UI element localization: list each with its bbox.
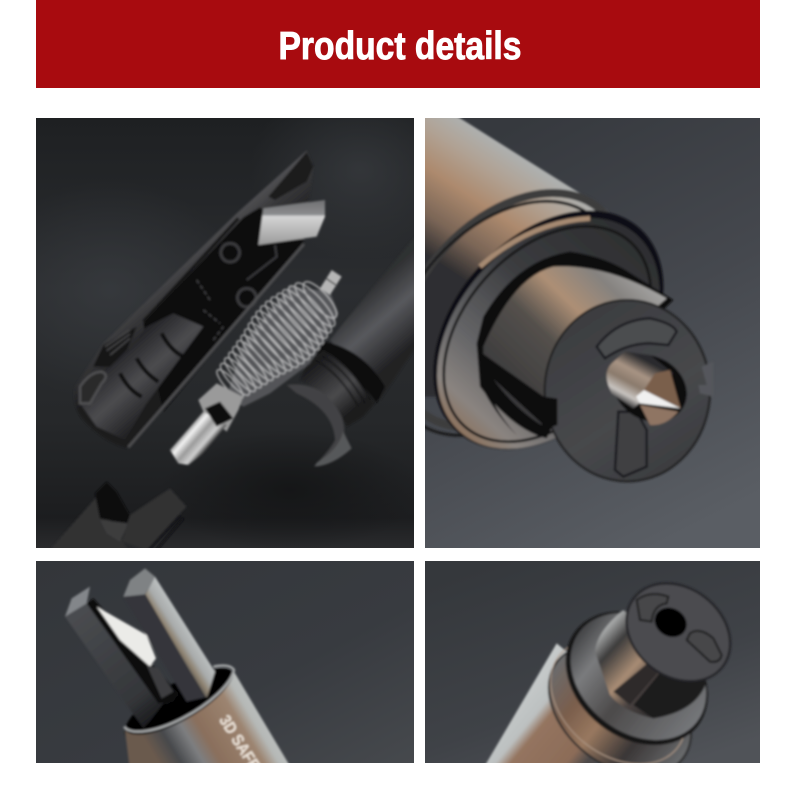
upper slot xyxy=(597,318,677,358)
end disc xyxy=(624,581,732,682)
panel: breaker tip close-up xyxy=(425,118,760,548)
center hole xyxy=(654,606,688,638)
title banner xyxy=(36,0,760,88)
title: Product details xyxy=(278,25,522,68)
blade xyxy=(258,200,325,245)
panel: rear view of breaker head xyxy=(425,561,760,763)
brand mark: 3D SAFETY xyxy=(215,712,274,790)
hole and breaker pin xyxy=(605,352,688,426)
neck xyxy=(477,252,673,438)
flange xyxy=(564,610,709,746)
back ring xyxy=(425,188,610,438)
firing pin xyxy=(170,270,342,465)
right prong xyxy=(123,568,215,702)
pen body xyxy=(425,118,596,398)
pen body xyxy=(484,642,594,763)
left prong with blade xyxy=(65,587,178,728)
panel: exploded view of cutter head xyxy=(36,118,414,548)
flange xyxy=(433,209,664,450)
lower left tool fragment xyxy=(54,482,186,548)
shadow at prong base xyxy=(142,696,208,728)
front disc xyxy=(538,300,713,481)
right tube with thread and c-ring xyxy=(288,243,414,468)
spring xyxy=(214,277,342,407)
lower slot xyxy=(615,412,647,477)
inner barrel xyxy=(80,313,203,440)
neck xyxy=(595,610,707,718)
tube with brand text xyxy=(122,663,290,763)
half shell housing xyxy=(74,151,313,448)
tube opening xyxy=(124,668,231,736)
panel: seatbelt cutter close-up xyxy=(36,561,414,763)
lower ring xyxy=(546,646,693,763)
